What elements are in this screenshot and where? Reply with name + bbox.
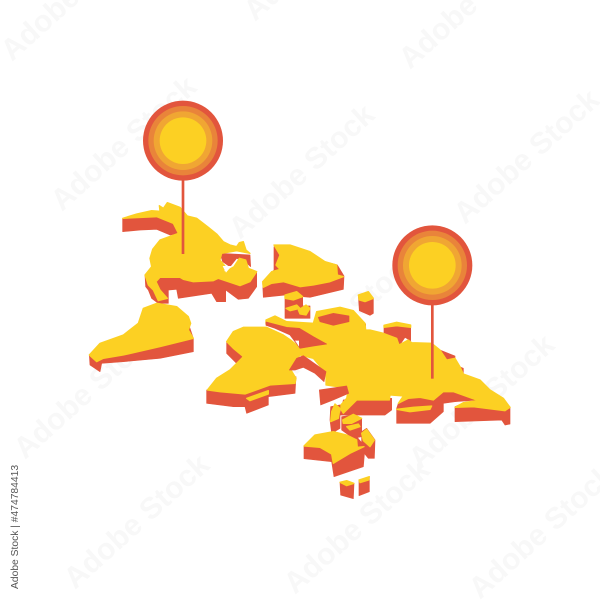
australia xyxy=(304,432,365,477)
south america xyxy=(89,303,193,372)
southern islands xyxy=(340,477,369,499)
red sea strip xyxy=(289,356,326,382)
watermark: Adobe Stock xyxy=(403,328,561,475)
north and south america xyxy=(89,101,257,372)
pin: asia xyxy=(392,225,472,379)
north asia island block xyxy=(384,322,411,346)
stock id: Adobe Stock | #474784413 xyxy=(10,465,21,589)
british isles xyxy=(285,292,310,318)
watermark: Adobe Stock xyxy=(58,448,216,595)
eastern hemisphere xyxy=(207,225,510,499)
white speck xyxy=(295,341,299,347)
north america xyxy=(123,203,257,303)
watermark: Adobe Stock xyxy=(268,243,426,390)
eurasia and africa top xyxy=(207,307,510,413)
watermark: Adobe Stock xyxy=(45,70,203,217)
small arctic island xyxy=(358,292,373,315)
watermark: Adobe Stock xyxy=(223,98,381,245)
mediterranean xyxy=(266,322,327,348)
pin: americas xyxy=(143,101,223,254)
indonesia stripe xyxy=(397,406,432,412)
white gap xyxy=(223,266,232,273)
southeast asia islands xyxy=(330,404,375,458)
arabian shadow xyxy=(319,386,349,405)
watermark: Adobe Stock xyxy=(8,318,166,465)
scandinavia inlet xyxy=(318,313,349,325)
greenland landmass xyxy=(263,245,344,297)
eurasia and africa shadow xyxy=(207,313,510,425)
madagascar xyxy=(247,391,268,401)
watermark: Adobe Stock xyxy=(278,453,436,600)
japan top xyxy=(455,401,510,411)
